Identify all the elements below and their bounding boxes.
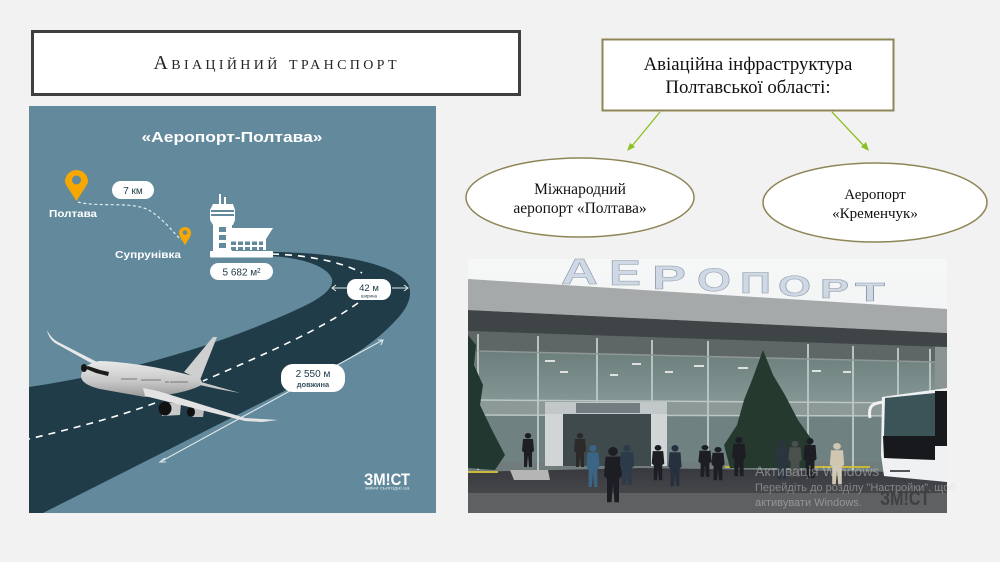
- runway: [29, 252, 410, 513]
- ellipse: Poltava airport: [466, 158, 694, 237]
- icon: airplane: [47, 330, 278, 422]
- watermark: активувати Windows.: [755, 497, 862, 509]
- ellipse: Poltava airport: Міжнародний: [534, 181, 626, 198]
- photo: airport terminal: [468, 251, 956, 513]
- logo: Zmist: зміни сьогодні.ua: [364, 486, 410, 490]
- length pill: довжина: [297, 380, 330, 389]
- panel heading: «Аеропорт-Полтава»: [142, 129, 322, 146]
- distance pill: [112, 181, 154, 199]
- arrow: to Poltava airport: [627, 112, 660, 151]
- ellipse: Kremenchuk airport: [763, 163, 987, 242]
- title: Авіаційний транспорт: [154, 52, 397, 74]
- entrance: [510, 402, 667, 480]
- watermark: Активація Windows: [755, 463, 879, 479]
- panel: airport infographic: [29, 106, 436, 513]
- ellipse: Kremenchuk airport: «Кременчук»: [832, 206, 918, 222]
- route dashed line: [78, 202, 181, 240]
- ground: [468, 468, 947, 513]
- label: Suprunivka: Супрунівка: [115, 250, 182, 261]
- infrastructure box: Авіаційна інфраструктура: [644, 54, 853, 75]
- distance pill: 7 км: [123, 186, 143, 197]
- soffit: [468, 310, 947, 347]
- watermark: [755, 463, 956, 509]
- length pill: [281, 364, 345, 392]
- title: [32, 32, 520, 94]
- area pill: 5 682 м²: [222, 268, 261, 278]
- icon: Suprunivka pin: [179, 227, 191, 245]
- width pill: ширина: [361, 294, 378, 298]
- ellipse: Kremenchuk airport: Аеропорт: [844, 187, 906, 203]
- length arrow: [160, 340, 383, 462]
- ellipse: Poltava airport: аеропорт «Полтава»: [513, 200, 647, 217]
- roof sign: О: [697, 262, 731, 298]
- roof sign: [561, 251, 885, 307]
- roof sign: Т: [855, 277, 885, 307]
- infrastructure box: [602, 40, 894, 110]
- roof sign: Р: [820, 274, 849, 304]
- roof sign: Е: [609, 254, 641, 293]
- roof sign: Р: [652, 259, 686, 296]
- arrow: to Kremenchuk airport: [832, 112, 869, 151]
- infrastructure box: Полтавської області:: [665, 77, 831, 98]
- central tree: [724, 350, 812, 468]
- logo: Zmist photo: ЗМ!СТ: [880, 488, 930, 510]
- roof sign: А: [561, 251, 598, 292]
- width pill: 42 м: [359, 283, 379, 294]
- roof: [468, 279, 947, 333]
- left tree: [468, 335, 505, 470]
- area pill: [210, 263, 273, 280]
- length pill: 2 550 м: [296, 369, 330, 380]
- label: Poltava: Полтава: [49, 209, 98, 220]
- people: [522, 433, 844, 502]
- icon: Poltava pin: [65, 170, 88, 201]
- roof sign: П: [740, 267, 771, 300]
- icon: terminal building: [210, 194, 273, 258]
- watermark: Перейдіть до розділу "Настройки", щоб: [755, 482, 956, 494]
- logo: Zmist: ЗМ!СТ: [364, 470, 411, 489]
- bus: [870, 388, 947, 482]
- width pill: [347, 279, 391, 300]
- roof sign: О: [778, 271, 811, 303]
- width arrows: [332, 285, 408, 291]
- terminal facade: [468, 330, 947, 472]
